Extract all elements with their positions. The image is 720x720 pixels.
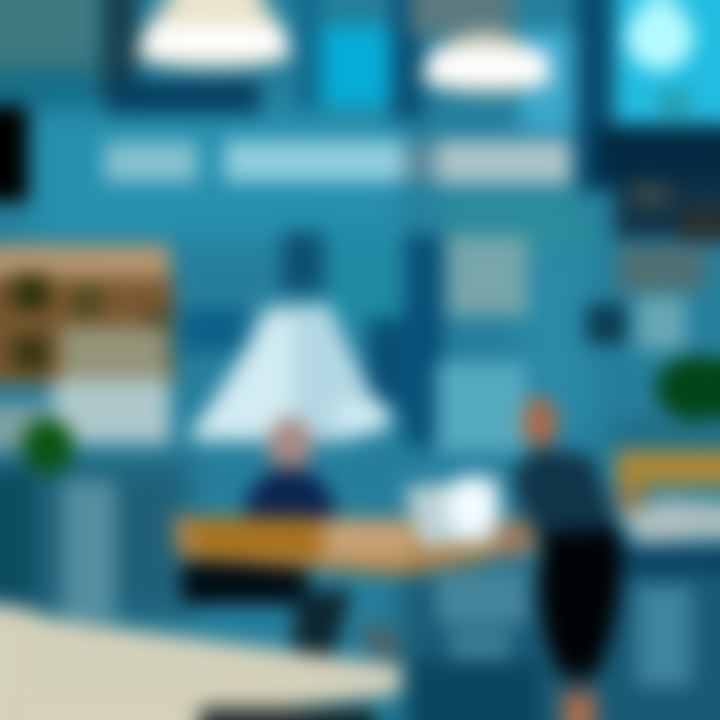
seated person head [268,417,312,473]
white triangular sculpture [188,304,390,442]
standing person head [522,396,558,448]
black wall block [0,106,28,202]
papers on desk [404,475,502,548]
foreground white table [0,602,402,720]
right plant [656,356,720,420]
pendant lamp left [136,0,292,68]
standing person torso [512,448,622,552]
pendant lamp right [420,32,554,93]
left plant [22,418,74,474]
vertical window columns [102,0,626,447]
blurred headline [104,140,572,184]
wooden desk [172,516,538,576]
lower wall panels [0,470,720,720]
dark right band [595,126,720,242]
standing person skirt [540,528,622,678]
seated person [244,417,336,522]
chair and legs under desk [182,562,402,666]
grey wall panels [436,236,704,452]
top right bright window [616,0,720,122]
seated person torso [244,468,336,522]
standing person [495,396,622,720]
white shelf objects [0,326,170,450]
standing person legs [562,690,596,720]
standing person arm [495,518,535,558]
right side desk [616,450,720,544]
top centre cyan panel [322,26,390,106]
dark table edge [200,708,375,720]
wooden shelf [0,244,174,384]
